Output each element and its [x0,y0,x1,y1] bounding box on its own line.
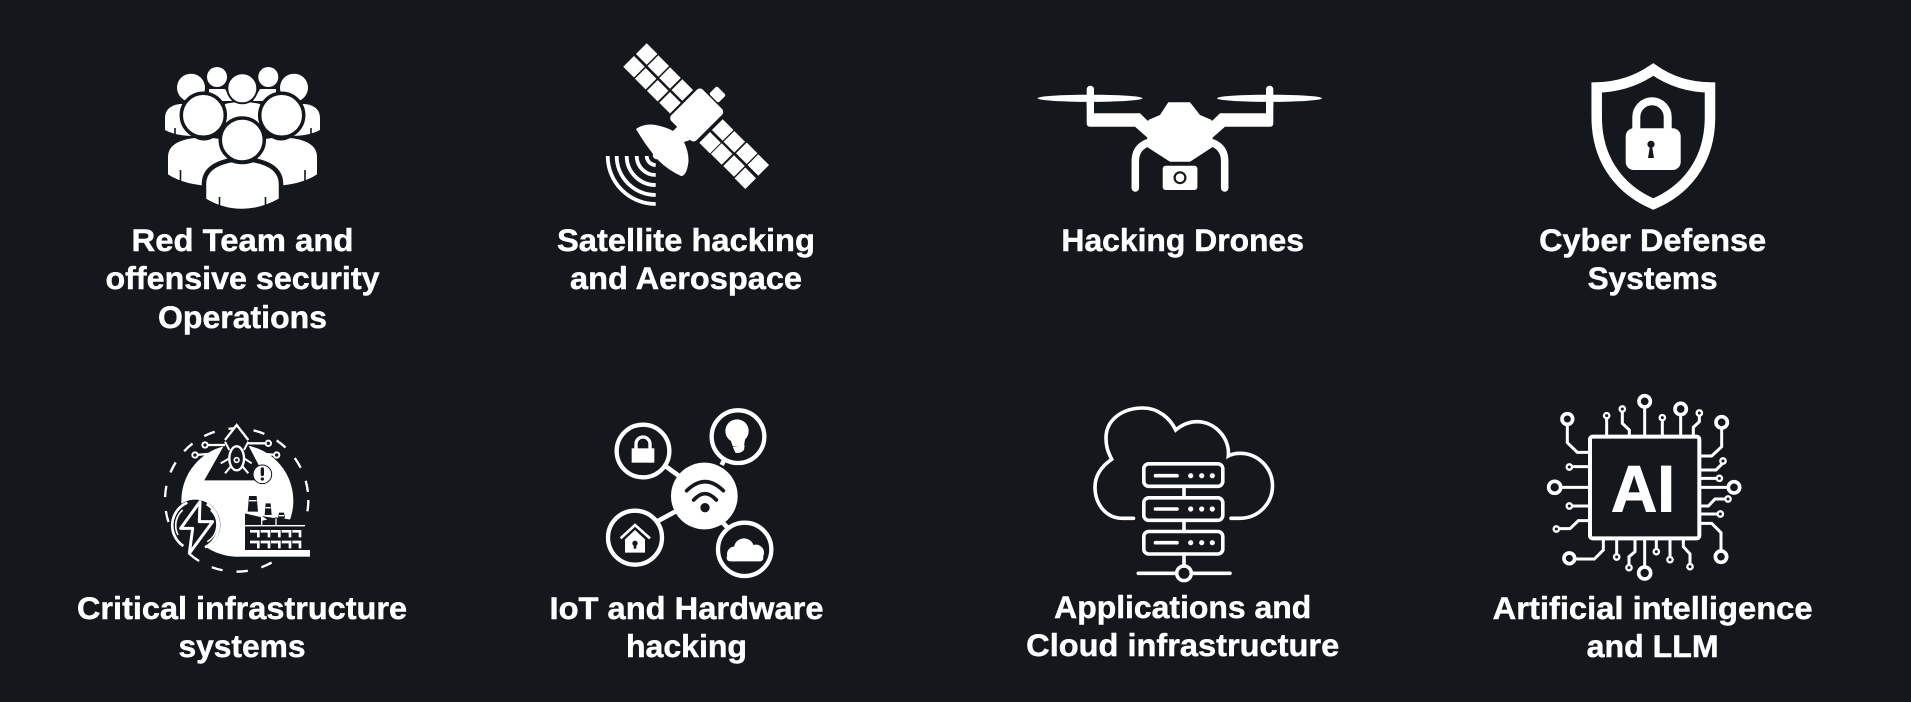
icon: satellite [608,43,769,204]
heading: artificial intelligence: Artificial intelligence [1493,590,1813,626]
heading: cyber defense: Systems [1588,260,1718,296]
icon: shield with padlock [1597,70,1710,204]
icon: group of people [165,67,320,211]
panel: cyber defense [1539,70,1766,296]
heading: red team [106,222,380,335]
panel: drones [1038,86,1322,258]
panel: critical infrastructure [77,425,407,664]
heading: red team: Operations [158,299,327,335]
heading: red team: Red Team and [132,222,354,258]
panel: artificial intelligence [1493,396,1813,664]
icon: cloud servers [1095,408,1272,581]
heading: critical infrastructure: systems [178,628,306,664]
heading: critical infrastructure: Critical infrastructure [77,590,407,626]
panel: red team [106,67,380,335]
heading: satellite [557,222,815,296]
heading: cyber defense: Cyber Defense [1539,222,1766,258]
heading: artificial intelligence [1493,590,1813,664]
heading: critical infrastructure [77,590,407,664]
heading: drones: Hacking Drones [1061,222,1304,258]
heading: red team: offensive security [106,260,380,296]
icon: AI chip: AI [1611,452,1675,526]
heading: applications and cloud [1026,589,1339,663]
heading: satellite: and Aerospace [570,260,802,296]
panel: applications and cloud [1026,408,1339,663]
heading: applications and cloud: Applications and [1054,589,1311,625]
icon: AI chip [1549,396,1740,579]
heading: IoT [550,590,824,664]
heading: IoT: hacking [626,628,747,664]
panel: IoT [550,410,824,664]
icon: drone [1038,86,1322,190]
heading: satellite: Satellite hacking [557,222,815,258]
heading: IoT: IoT and Hardware [550,590,824,626]
icon: IoT network [608,410,771,576]
heading: cyber defense [1539,222,1766,296]
panel: satellite [557,43,815,296]
heading: artificial intelligence: and LLM [1587,628,1719,664]
icon: critical infrastructure [165,425,310,572]
heading: applications and cloud: Cloud infrastructure [1026,627,1339,663]
